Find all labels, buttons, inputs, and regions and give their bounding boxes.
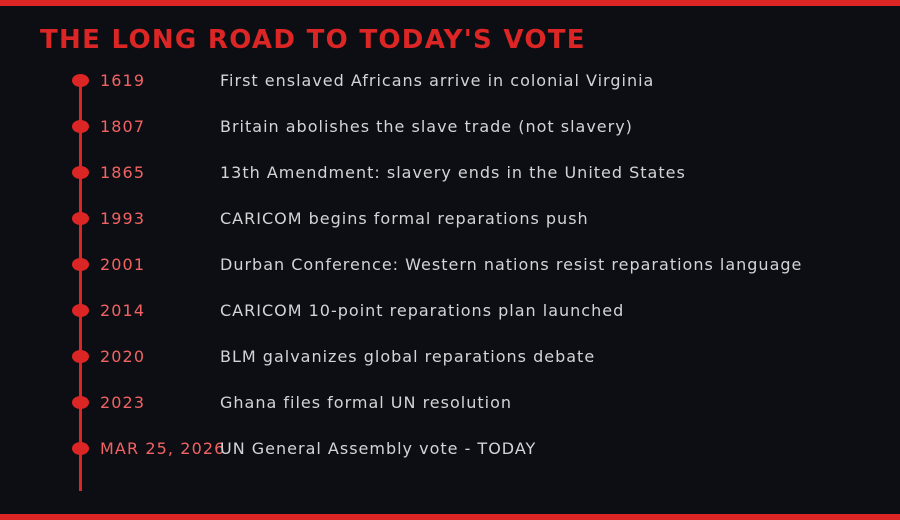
event 1619: 1619 [100, 71, 145, 90]
event 2001: 2001 [100, 255, 145, 274]
event 1807: 1807 [100, 117, 145, 136]
event 1619: First enslaved Africans arrive in colonial Virginia [220, 71, 654, 90]
bottom bar [0, 514, 900, 520]
event 1993: CARICOM begins formal reparations push [220, 209, 589, 228]
title: THE LONG ROAD TO TODAY'S VOTE [40, 25, 586, 55]
event 1993: 1993 [100, 209, 145, 228]
event 2023 [72, 393, 512, 412]
event 2014: CARICOM 10-point reparations plan launched [220, 301, 624, 320]
event 2023: Ghana files formal UN resolution [220, 393, 512, 412]
timeline line [79, 80, 82, 491]
top bar [0, 0, 900, 6]
event 2020: 2020 [100, 347, 145, 366]
event 1807: Britain abolishes the slave trade (not slavery) [220, 117, 633, 136]
event 2023: 2023 [100, 393, 145, 412]
event 1865: 13th Amendment: slavery ends in the United States [220, 163, 686, 182]
event 2026 [72, 439, 536, 458]
event 2001: Durban Conference: Western nations resist reparations language [220, 255, 802, 274]
event 2014: 2014 [100, 301, 145, 320]
event 1865: 1865 [100, 163, 145, 182]
event 2026: UN General Assembly vote - TODAY [220, 439, 536, 458]
event 2026: MAR 25, 2026 [100, 439, 225, 458]
event 2020: BLM galvanizes global reparations debate [220, 347, 595, 366]
